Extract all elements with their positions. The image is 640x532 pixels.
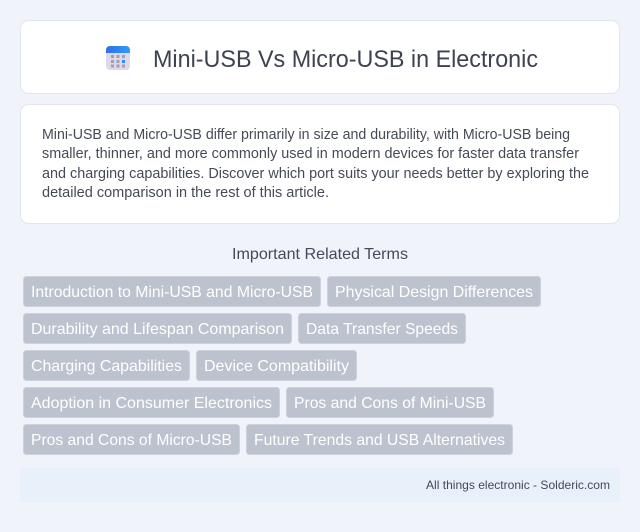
- tag: Physical Design Differences: [335, 284, 533, 301]
- summary text: detailed comparison in the rest of this article.: [42, 185, 329, 201]
- tag: Adoption in Consumer Electronics: [31, 395, 272, 412]
- title: Mini-USB Vs Micro-USB in Electronic: [153, 46, 538, 73]
- tag: [24, 424, 240, 454]
- tag: [24, 350, 190, 380]
- tag: [328, 276, 540, 306]
- tag: [298, 314, 466, 344]
- tag: [286, 388, 494, 418]
- tag: [24, 276, 320, 306]
- tag: Pros and Cons of Micro-USB: [31, 432, 232, 449]
- tag: Device Compatibility: [204, 358, 349, 375]
- summary text: [42, 127, 589, 201]
- tag: [246, 424, 512, 454]
- tag: Pros and Cons of Mini-USB: [294, 395, 486, 412]
- icon: calendar: [106, 46, 130, 70]
- summary text: smaller, thinner, and more commonly used in modern devices for faster data transfer: [42, 146, 579, 162]
- tag list: [24, 276, 540, 454]
- tag: Charging Capabilities: [31, 358, 182, 375]
- tag: Data Transfer Speeds: [306, 321, 458, 338]
- summary text: and charging capabilities. Discover which port suits your needs better by exploring the: [42, 166, 589, 182]
- panel: summary: [20, 104, 620, 224]
- tag: [196, 350, 356, 380]
- tag: Introduction to Mini-USB and Micro-USB: [31, 284, 313, 301]
- panel: title header: [20, 20, 620, 94]
- tag: [24, 314, 292, 344]
- tag: Future Trends and USB Alternatives: [254, 432, 505, 449]
- footer: [20, 468, 620, 502]
- tag: [24, 388, 280, 418]
- footer text: All things electronic - Solderic.com: [426, 478, 610, 492]
- tag: Durability and Lifespan Comparison: [31, 321, 284, 338]
- heading: important related terms: Important Related Terms: [232, 246, 408, 263]
- summary text: Mini-USB and Micro-USB differ primarily in size and durability, with Micro-USB being: [42, 127, 570, 143]
